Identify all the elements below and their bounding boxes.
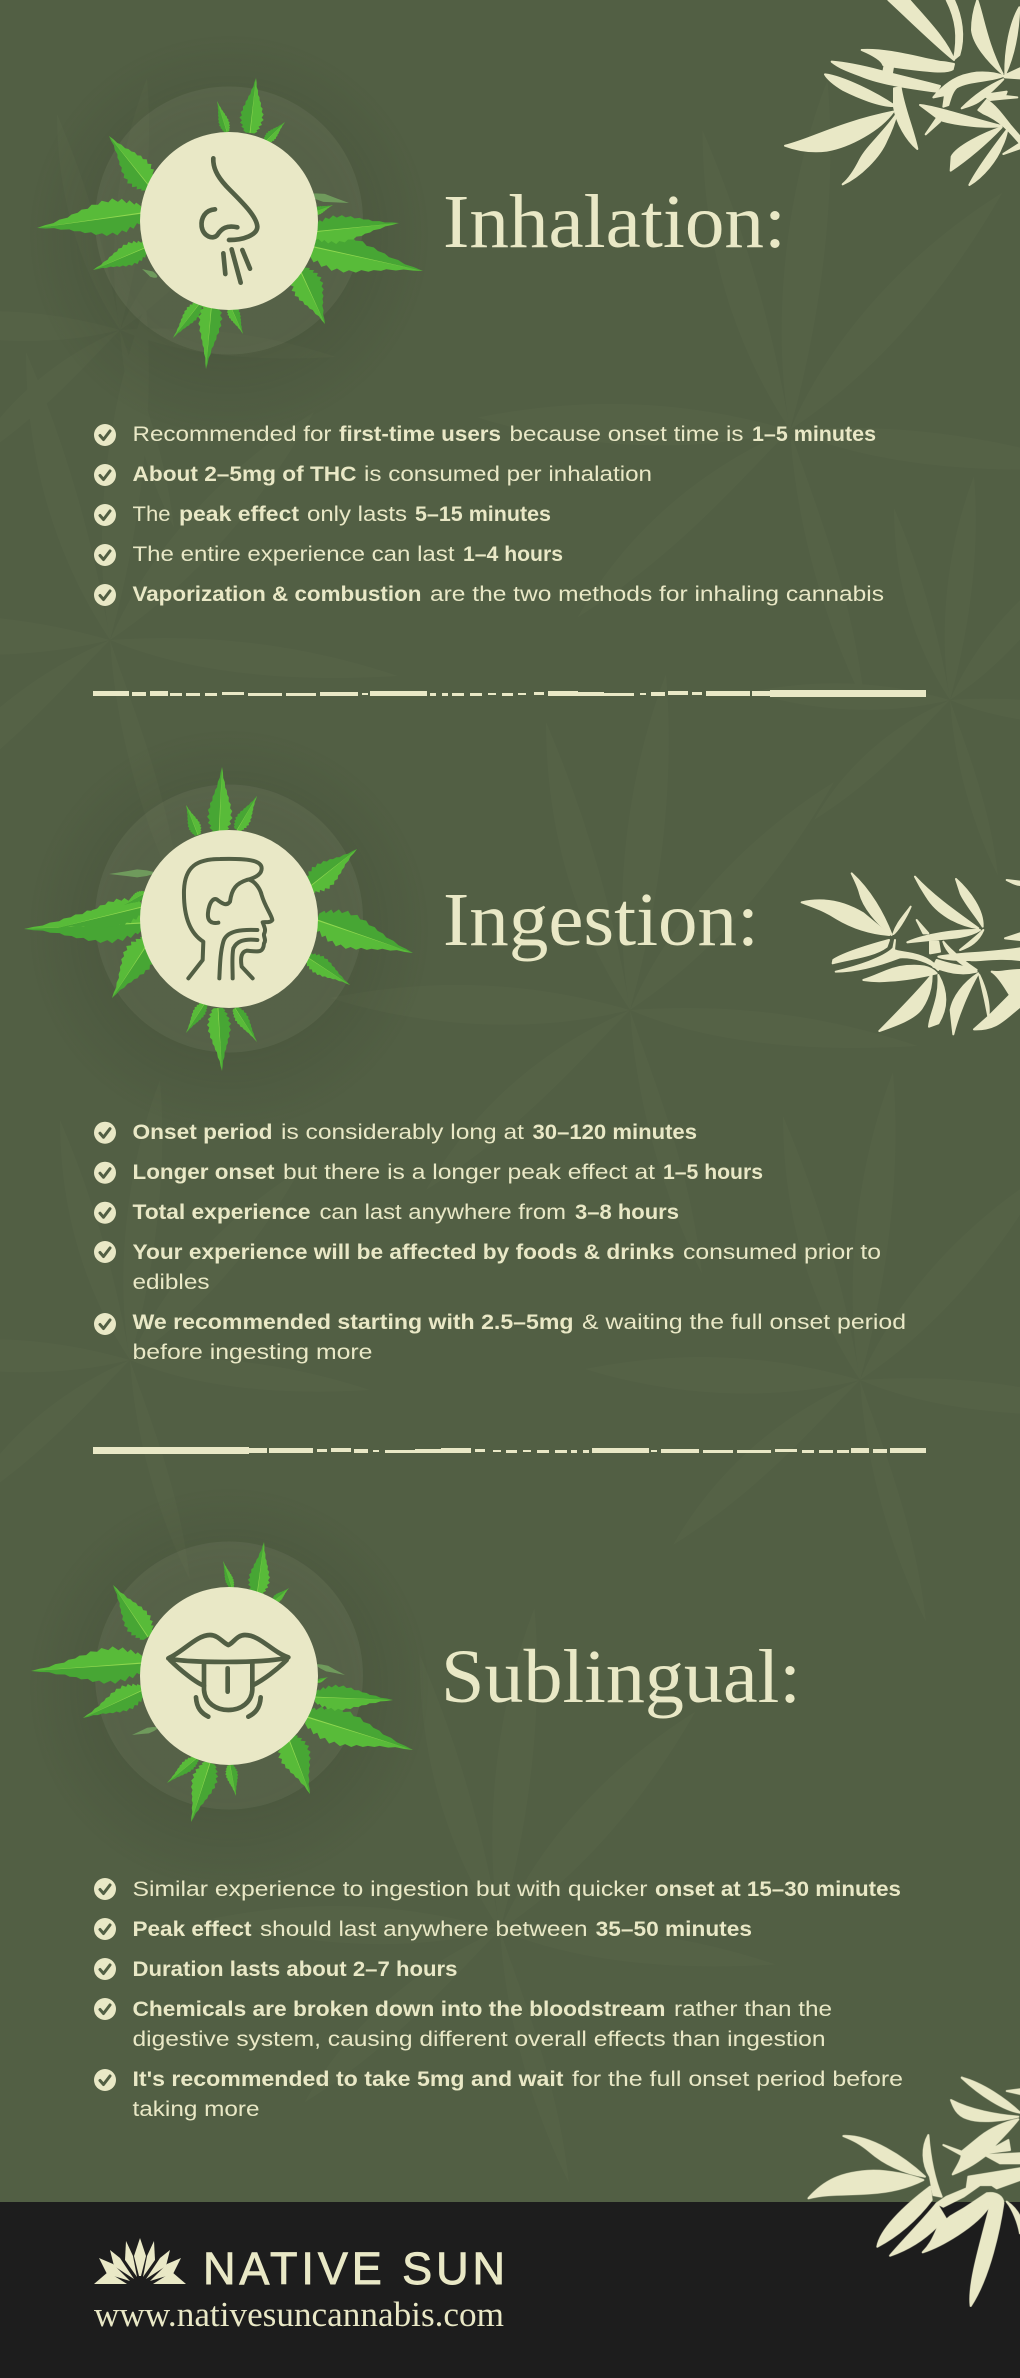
bullet 4: Your experience will be affected by foods & drinks	[132, 1240, 675, 1264]
emblem: ingestion head	[23, 730, 429, 1130]
bullet 2	[94, 462, 652, 486]
logo wordmark: NATIVE SUN	[203, 2243, 505, 2294]
bullet 4: The entire experience can last	[132, 542, 455, 566]
bullet list: ingestion	[94, 1120, 906, 1364]
decorative spray: middle right	[802, 873, 1020, 1034]
bullet 5	[94, 1310, 906, 1364]
emblem: sublingual mouth	[29, 1488, 429, 1888]
bullet 2	[94, 1160, 763, 1184]
bullet 2: but there is a longer peak effect at	[283, 1160, 655, 1184]
decorative spray: bottom right	[808, 2078, 1020, 2306]
bullet 3	[94, 502, 551, 526]
bullet 4: 1–4 hours	[463, 542, 563, 566]
bullet 4: digestive system, causing different overall effects than ingestion	[132, 2027, 826, 2051]
bullet 3	[94, 1200, 679, 1224]
bullet 1: 30–120 minutes	[532, 1120, 697, 1144]
website: www.nativesuncannabis.com	[94, 2295, 504, 2334]
bullet 3: only lasts	[307, 502, 407, 526]
heading: Ingestion: Ingestion:	[443, 878, 759, 962]
bullet 5: It's recommended to take 5mg and wait	[132, 2067, 564, 2091]
bullet 2	[94, 1917, 752, 1941]
bullet 5: We recommended starting with 2.5–5mg	[132, 1310, 574, 1334]
bullet 1	[94, 422, 876, 446]
heading: Sublingual: Sublingual:	[441, 1635, 801, 1719]
bullet 1: Onset period	[132, 1120, 272, 1144]
bullet 4	[94, 1997, 832, 2051]
bullet 2: 35–50 minutes	[596, 1917, 752, 1941]
bullet 1: Recommended for	[132, 422, 332, 446]
bullet 1	[94, 1877, 901, 1901]
bullet 5: for the full onset period before	[572, 2067, 903, 2091]
bullet 2: Peak effect	[132, 1917, 252, 1941]
decorative spray: top right	[785, 0, 1020, 185]
bullet 1	[94, 1120, 697, 1144]
bullet 2: Longer onset	[132, 1160, 274, 1184]
bullet 2: is consumed per inhalation	[364, 462, 652, 486]
bullet 1: because onset time is	[510, 422, 744, 446]
bullet 1: first-time users	[339, 422, 501, 446]
bullet 3: 3–8 hours	[575, 1200, 679, 1224]
bullet 1: onset at 15–30 minutes	[655, 1877, 901, 1901]
bullet 4: consumed prior to	[683, 1240, 881, 1264]
footer logo and website	[94, 2238, 505, 2334]
bullet 3: Duration lasts about 2–7 hours	[132, 1957, 458, 1981]
bullet 5	[94, 582, 884, 606]
bullet 1: Similar experience to ingestion but with quicker	[132, 1877, 648, 1901]
bullet 3: can last anywhere from	[320, 1200, 566, 1224]
bullet 5: & waiting the full onset period	[582, 1310, 906, 1334]
bullet 4: edibles	[132, 1270, 210, 1294]
heading: Inhalation: Inhalation:	[443, 180, 786, 264]
bullet 1: is considerably long at	[281, 1120, 524, 1144]
bullet 3: The	[132, 502, 170, 526]
bullet 5: Vaporization & combustion	[132, 582, 422, 606]
bullet 5	[94, 2067, 903, 2121]
bullet 4	[94, 1240, 881, 1294]
bullet 5: taking more	[132, 2097, 260, 2121]
bullet list: inhalation	[94, 422, 884, 606]
emblem: inhalation nose	[29, 35, 429, 435]
bullet 4: rather than the	[674, 1997, 832, 2021]
bullet list: sublingual	[94, 1877, 903, 2121]
bullet 2: 1–5 hours	[663, 1160, 763, 1184]
bullet 3: Total experience	[132, 1200, 311, 1224]
bullet 3: 5–15 minutes	[415, 502, 551, 526]
bullet 2: About 2–5mg of THC	[132, 462, 356, 486]
bullet 1: 1–5 minutes	[752, 422, 876, 446]
bullet 5: before ingesting more	[132, 1340, 372, 1364]
panel: inhalation	[29, 35, 884, 606]
bullet 3: peak effect	[179, 502, 299, 526]
logo icon: sun leaf	[94, 2238, 186, 2284]
footer band	[0, 2202, 1020, 2378]
bullet 4: Chemicals are broken down into the bloodstream	[132, 1997, 666, 2021]
bullet 2: should last anywhere between	[260, 1917, 588, 1941]
bullet 5: are the two methods for inhaling cannabis	[430, 582, 884, 606]
panel: sublingual	[29, 1488, 903, 2121]
bullet 4	[94, 542, 563, 566]
panel: ingestion	[23, 730, 906, 1364]
